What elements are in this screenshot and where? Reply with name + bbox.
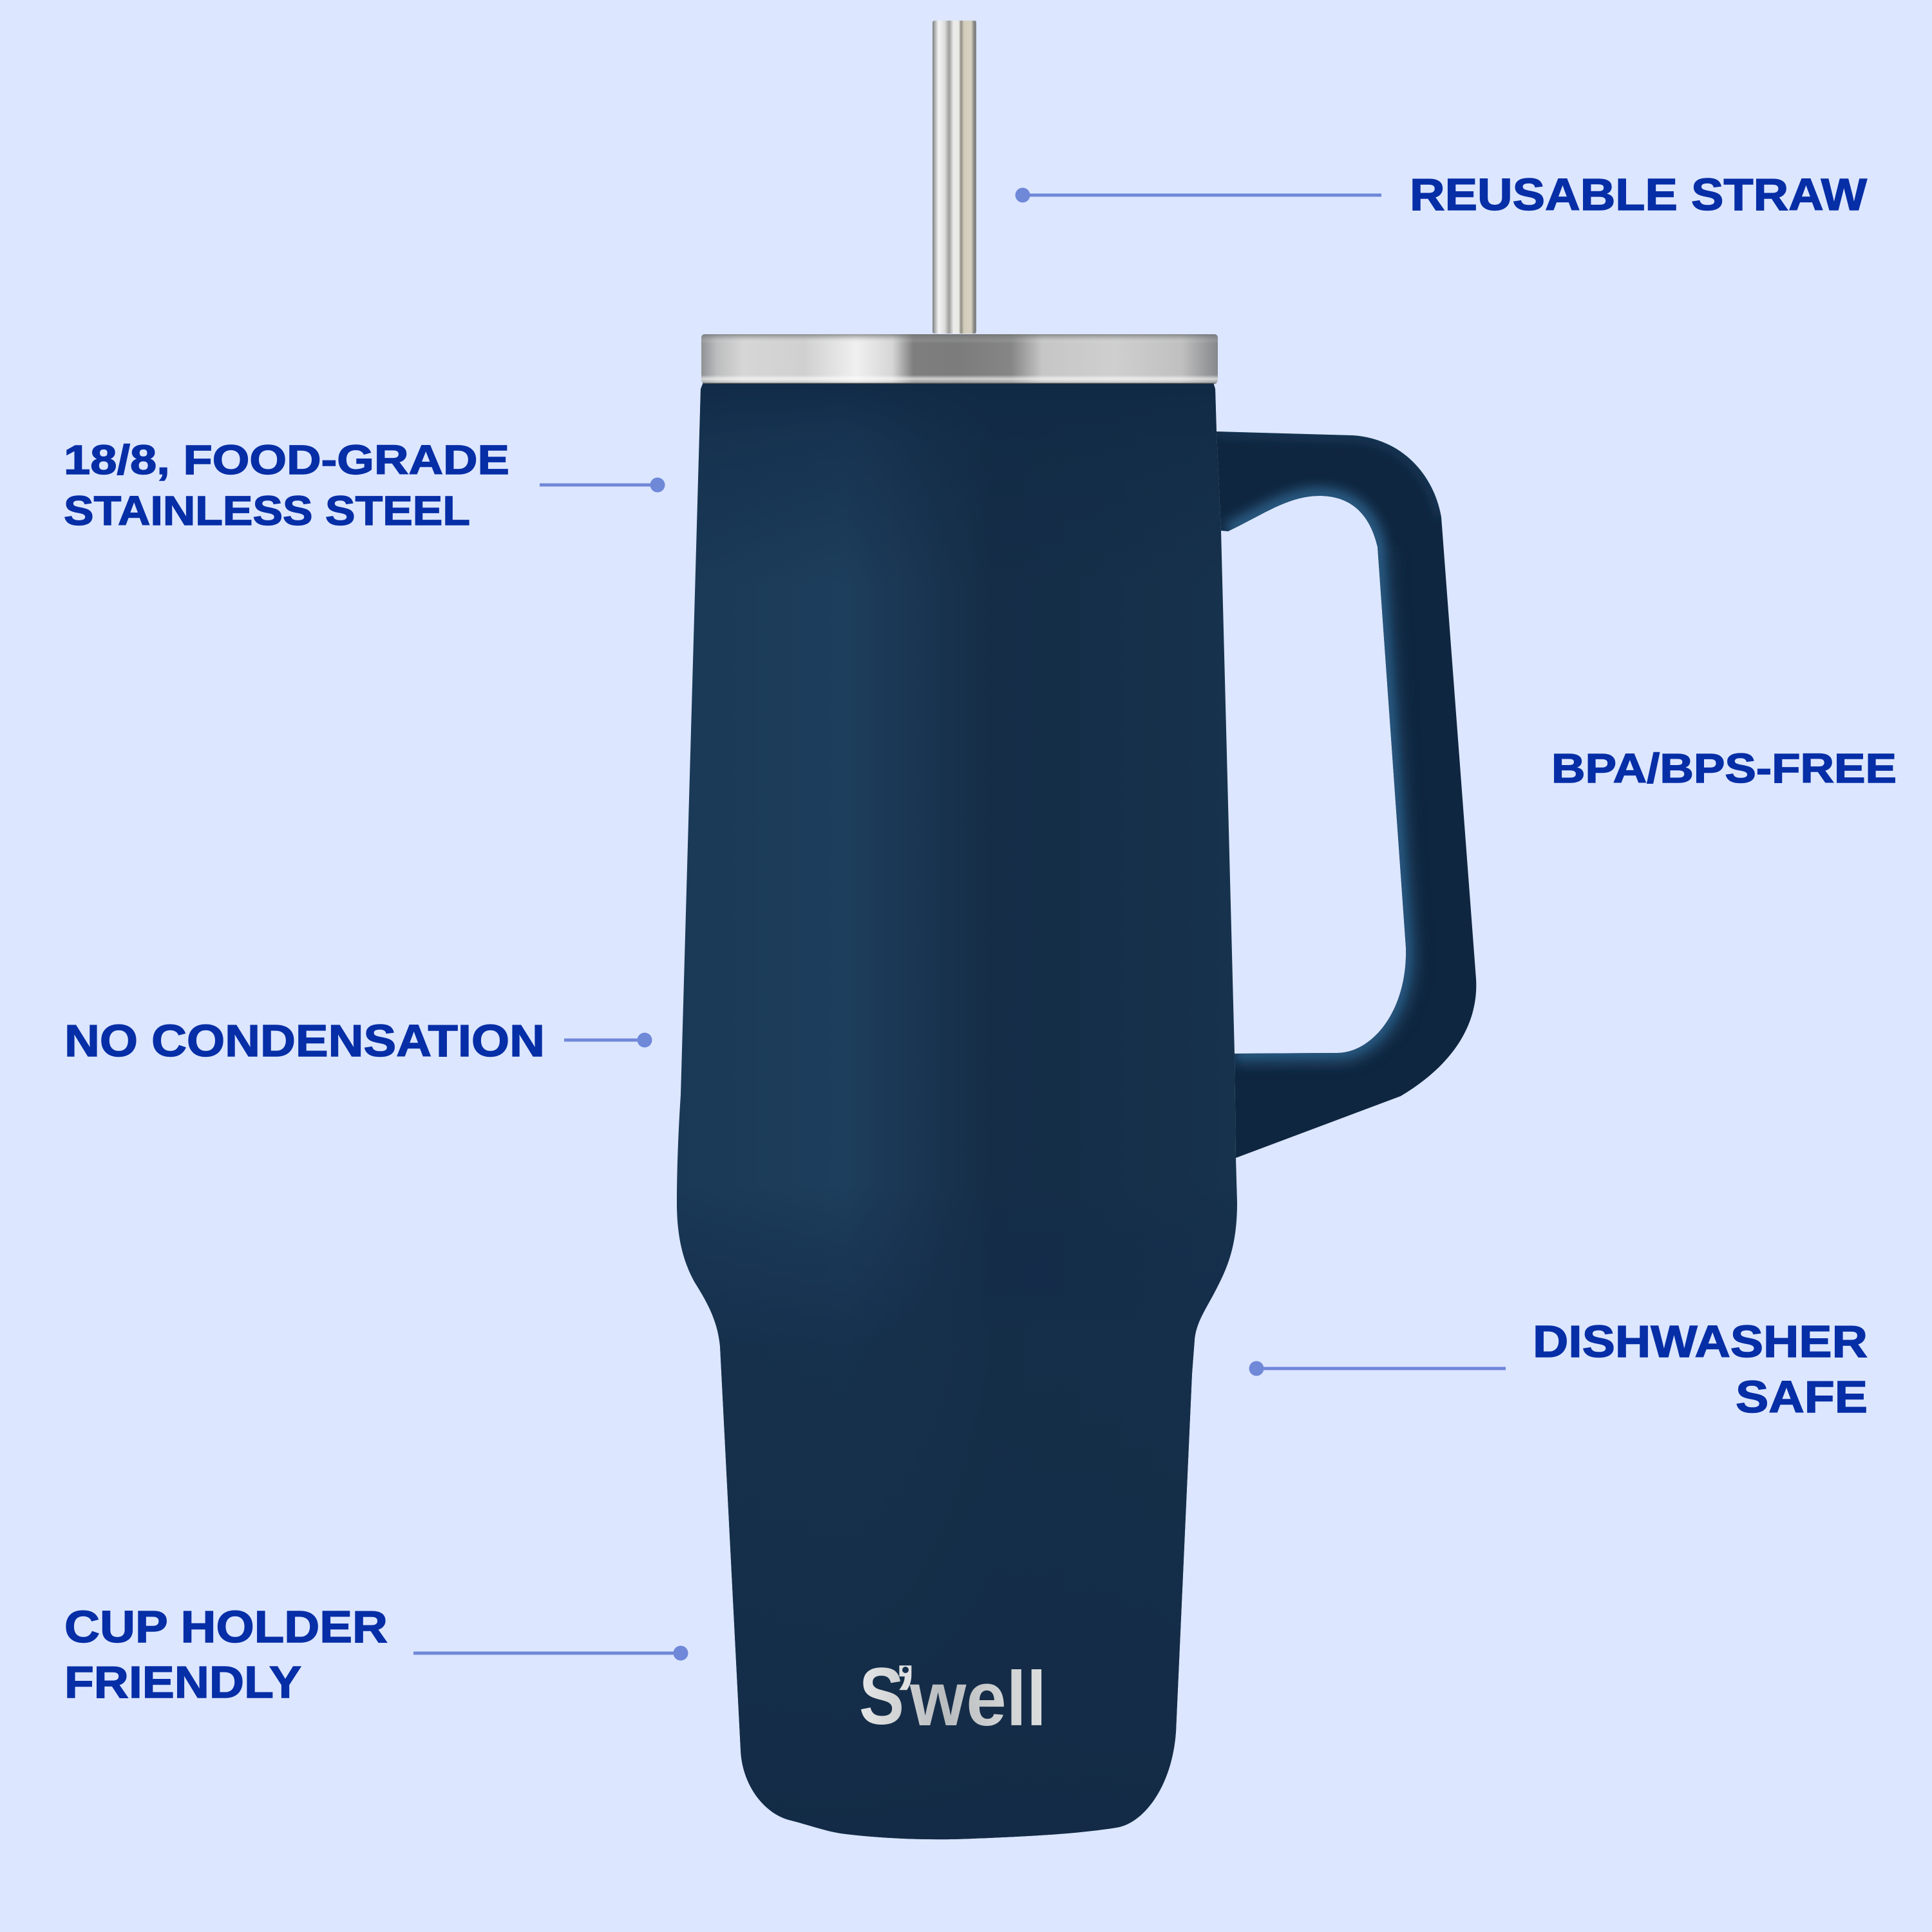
callout: cup holder friendly: CUP HOLDER [64, 1602, 388, 1652]
callout: no condensation: NO CONDENSATION [64, 1016, 545, 1066]
stainless steel lid [701, 334, 1218, 384]
callout: stainless steel [64, 437, 665, 534]
callout: reusable straw [1015, 169, 1867, 220]
callout: BPA/BPS-free: BPA/BPS-FREE [1551, 745, 1897, 791]
callout: stainless steel: STAINLESS STEEL [64, 488, 470, 534]
callout: dishwasher safe: DISHWASHER [1533, 1316, 1868, 1367]
callout: dishwasher safe [1249, 1316, 1868, 1422]
callout: cup holder friendly: FRIENDLY [64, 1657, 301, 1707]
callout: cup holder friendly [64, 1602, 688, 1707]
S'well logo [859, 1647, 1046, 1744]
S'well logo: well [909, 1656, 1046, 1742]
S'well logo: S [859, 1652, 904, 1741]
S'well logo: ’ [893, 1647, 918, 1744]
callout: stainless steel: 18/8, FOOD-GRADE [64, 437, 509, 483]
icon: reusable metal straw [933, 21, 976, 334]
body vertical shading [677, 383, 1237, 1839]
tumbler body [677, 383, 1237, 1839]
tumbler handle [1217, 431, 1476, 1158]
callout: dishwasher safe: SAFE [1736, 1372, 1868, 1422]
callout: reusable straw: REUSABLE STRAW [1410, 169, 1867, 220]
tumbler product [677, 21, 1476, 1839]
